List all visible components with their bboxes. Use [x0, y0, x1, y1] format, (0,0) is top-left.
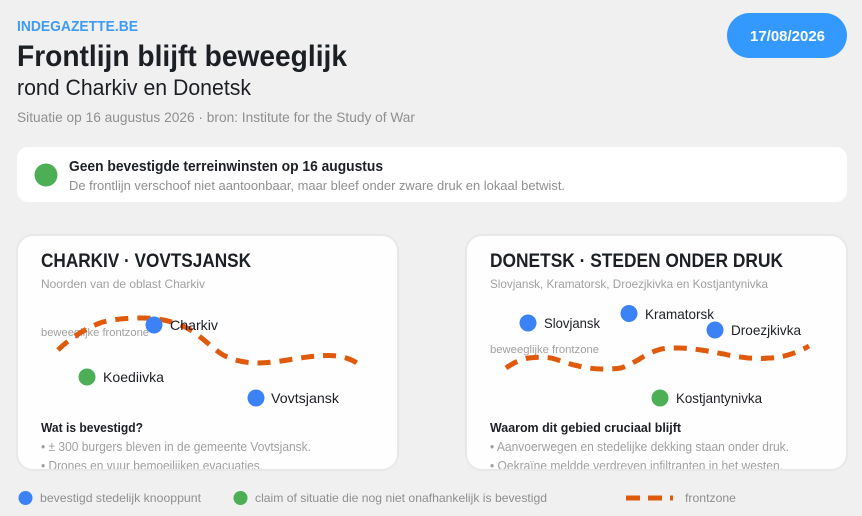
city marker: Slovjansk: Slovjansk [544, 315, 601, 331]
map label: frontzone: beweeglijke frontzone [41, 327, 149, 339]
city marker: Charkiv [146, 316, 218, 334]
city marker: Charkiv: Charkiv [170, 317, 218, 333]
panel subheading: Noorden van de oblast Charkiv [41, 277, 205, 291]
bullet list: • Aanvoerwegen en stedelijke dekking staan onder druk. [490, 440, 789, 454]
panel heading: CHARKIV · VOVTSJANSK [41, 251, 251, 272]
city marker: Vovtsjansk [248, 390, 340, 406]
legend [18, 491, 736, 505]
legend item: unconfirmed claim: claim of situatie die nog niet onafhankelijk is bevestigd [255, 491, 547, 505]
bullet list: • ± 300 burgers bleven in de gemeente Vovtsjansk. [41, 440, 311, 454]
city marker: Koediivka [78, 368, 164, 386]
frontline [506, 346, 809, 369]
title: Frontlijn blijft beweeglijk [17, 40, 347, 73]
bullet list [490, 442, 788, 469]
legend item: front zone: frontzone [685, 491, 736, 505]
legend item: front zone [626, 491, 736, 505]
panel heading: DONETSK · STEDEN ONDER DRUK [490, 251, 783, 272]
city marker: Droezjkivka: Droezjkivka [731, 322, 801, 338]
city marker: Kostjantynivka: Kostjantynivka [676, 390, 762, 406]
status description: De frontlijn verschoof niet aantoonbaar, maar bleef onder zware druk en lokaal betwist. [69, 179, 565, 193]
date badge: 17/08/2026 [750, 29, 825, 45]
panel: Charkiv Vovtsjansk [17, 235, 398, 473]
frontline [58, 318, 362, 367]
section heading: Waarom dit gebied cruciaal blijft [490, 420, 682, 435]
panel subheading: Slovjansk, Kramatorsk, Droezjkivka en Kostjantynivka [490, 277, 768, 291]
status banner [17, 147, 847, 202]
panel: Donetsk steden onder druk [466, 235, 847, 473]
icon: green status dot [34, 164, 58, 186]
brand label: INDEGAZETTE.BE [17, 18, 138, 35]
city marker: Kramatorsk [620, 305, 715, 322]
source line: Situatie op 16 augustus 2026 · bron: Institute for the Study of War [17, 109, 415, 125]
city marker: Vovtsjansk: Vovtsjansk [271, 390, 340, 406]
status heading: Geen bevestigde terreinwinsten op 16 augustus [69, 158, 383, 175]
map label: frontzone: beweeglijke frontzone [490, 344, 599, 356]
city marker: Kramatorsk: Kramatorsk [645, 306, 715, 322]
bullet list: • Oekraïne meldde verdreven infiltranten in het westen. [490, 459, 783, 473]
subtitle: rond Charkiv en Donetsk [17, 75, 252, 100]
city marker: Slovjansk [520, 314, 601, 332]
city marker: Koediivka: Koediivka [103, 369, 164, 385]
bullet list: • Drones en vuur bemoeilijken evacuaties. [41, 459, 263, 473]
date badge [727, 13, 847, 58]
legend item: confirmed node: bevestigd stedelijk knooppunt [40, 491, 202, 505]
section heading: Wat is bevestigd? [41, 420, 143, 435]
bullet list [42, 442, 310, 469]
city marker: Droezjkivka [706, 322, 801, 338]
